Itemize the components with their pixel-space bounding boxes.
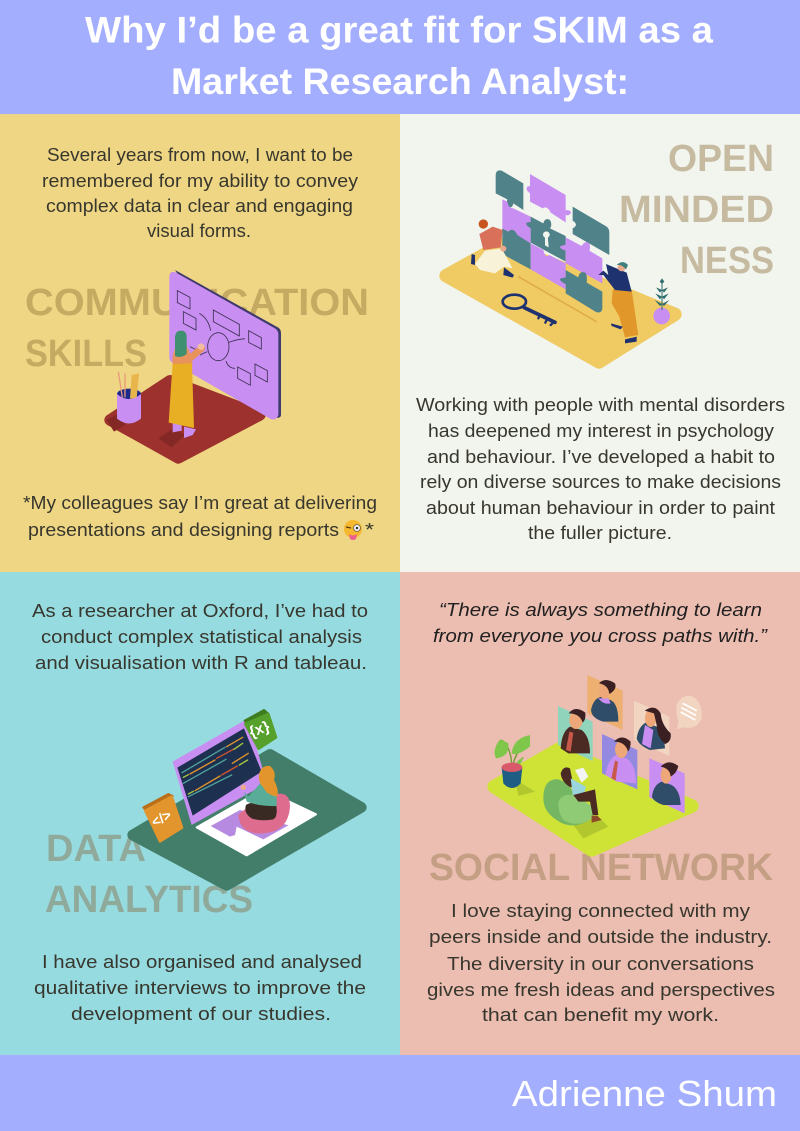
person card: woman long hair: [634, 701, 671, 756]
text block: quote: from everyone you cross paths with.”: [433, 625, 768, 646]
text block: social network body: that can benefit my work.: [482, 1004, 719, 1025]
board: [169, 270, 281, 419]
text block: communication intro: remembered for my ability to convey: [42, 170, 359, 191]
person card: man centre: [602, 734, 637, 789]
panel: footer band: [0, 1055, 800, 1131]
plant: [653, 278, 670, 324]
heading: open mindedness: MINDED: [619, 189, 774, 231]
woman figure: [158, 331, 204, 447]
text block: open mindedness body: the fuller picture.: [528, 522, 672, 543]
heading: open mindedness: [619, 138, 774, 282]
text block: communication intro: [42, 144, 359, 241]
text block: communication intro: Several years from now, I want to be: [47, 144, 353, 165]
text block: qualitative interviews: I have also organised and analysed: [42, 951, 362, 972]
title: [85, 10, 713, 102]
text block: quote: [433, 599, 768, 646]
text block: colleagues note: presentations and designing reports: [28, 519, 339, 540]
illustration: woman at mind-map board: [105, 270, 281, 458]
illustration: social network video call: [494, 675, 702, 850]
heading: data analytics: DATA: [46, 828, 146, 870]
text block: communication intro: visual forms.: [147, 220, 251, 241]
illustration: coder at laptop: [133, 710, 361, 885]
illustration: puzzle and key: [446, 170, 675, 362]
text block: colleagues note: [23, 492, 377, 540]
icon: code cube: [143, 794, 182, 841]
text block: oxford research: conduct complex statistical analysis: [41, 626, 362, 647]
text block: open mindedness body: [416, 394, 785, 543]
text block: social network body: gives me fresh ideas and perspectives: [427, 979, 775, 1000]
key: [503, 295, 555, 325]
text block: communication intro: complex data in clear and engaging: [46, 195, 353, 216]
text block: social network body: peers inside and outside the industry.: [429, 926, 772, 947]
footer name: Adrienne Shum: [512, 1073, 777, 1114]
pencil cup: [105, 372, 141, 433]
text block: quote: “There is always something to learn: [439, 599, 762, 620]
laptop: [173, 718, 316, 855]
heading: data analytics: [45, 828, 253, 921]
text block: oxford research: and visualisation with R and tableau.: [35, 652, 367, 673]
text block: oxford research: As a researcher at Oxford, I’ve had to: [32, 600, 368, 621]
woman on beanbag: [238, 766, 290, 833]
floor: [494, 749, 692, 850]
heading: data analytics: ANALYTICS: [45, 879, 253, 921]
floor crease: [518, 277, 597, 322]
man pushing: [598, 262, 638, 343]
text block: open mindedness body: rely on diverse sources to make decisions: [420, 471, 781, 492]
panel: header band: [0, 0, 800, 114]
heading: open mindedness: OPEN: [668, 138, 774, 180]
text block: open mindedness body: about human behaviour in order to paint: [426, 497, 775, 518]
heading: open mindedness: NESS: [680, 240, 774, 282]
person card: man left: [558, 706, 593, 761]
floor: [133, 754, 361, 885]
text block: social network body: [427, 900, 775, 1025]
text block: colleagues note: *: [365, 519, 374, 540]
text block: qualitative interviews: development of our studies.: [71, 1003, 331, 1024]
man kneeling: [471, 219, 514, 278]
panel: communication skills: [0, 114, 400, 572]
text block: qualitative interviews: qualitative interviews to improve the: [34, 977, 366, 998]
text block: open mindedness body: and behaviour. I’ve developed a habit to: [427, 446, 775, 467]
text block: oxford research: [32, 600, 368, 673]
plant: [495, 735, 535, 796]
icon: winking tongue emoji: [344, 520, 362, 540]
icon: variable cube: [245, 710, 276, 749]
heading: communication skills: COMMUNICATION: [25, 282, 369, 324]
text block: social network body: I love staying connected with my: [451, 900, 751, 921]
text block: social network body: The diversity in our conversations: [447, 953, 754, 974]
panel: social network: [400, 572, 800, 1055]
woman in armchair: [543, 767, 608, 838]
floor: [110, 381, 260, 458]
title: Market Research Analyst:: [171, 61, 629, 102]
person card: woman right: [649, 758, 685, 813]
floor: [446, 244, 675, 362]
heading: communication skills: [25, 282, 369, 375]
icon: code cube: </>: [149, 806, 174, 830]
title: Why I’d be a great fit for SKIM as a: [85, 10, 713, 50]
text block: open mindedness body: has deepened my interest in psychology: [428, 420, 775, 441]
text block: qualitative interviews: [34, 951, 366, 1024]
speech bubble: [676, 696, 702, 729]
panel: data analytics: [0, 572, 400, 1055]
heading: communication skills: SKILLS: [25, 333, 147, 375]
icon: variable cube: {x}: [247, 718, 272, 741]
text block: open mindedness body: Working with people with mental disorders: [416, 394, 785, 415]
panel: open mindedness: [400, 114, 800, 572]
person card: top: [587, 675, 623, 730]
puzzle: [496, 170, 609, 313]
text block: colleagues note: *My colleagues say I’m great at delivering: [23, 492, 377, 513]
heading: social network: SOCIAL NETWORK: [429, 847, 774, 889]
